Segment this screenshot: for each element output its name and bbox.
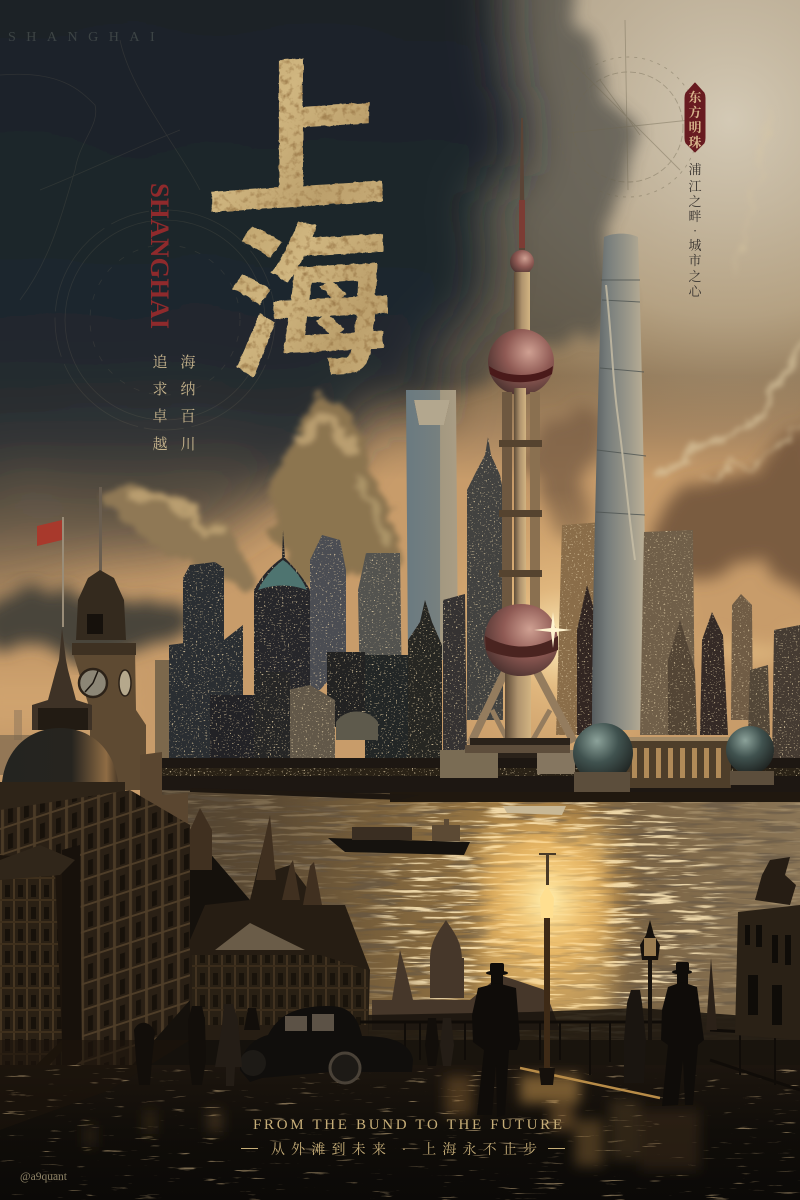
domed cupola building — [0, 628, 125, 812]
sun glow — [400, 480, 720, 780]
clock face right — [119, 670, 131, 696]
main title 上海 — [204, 0, 392, 414]
small figures by fence — [425, 1018, 439, 1066]
facade — [192, 955, 368, 1025]
background: sky — [0, 0, 800, 800]
tower behind — [183, 562, 243, 700]
map lines left — [0, 40, 275, 430]
man near buildings — [134, 1023, 155, 1085]
mid tower — [327, 652, 365, 727]
people left — [134, 1004, 454, 1086]
sphere band — [489, 366, 553, 382]
tower body — [72, 650, 146, 790]
Bund middle buildings — [190, 808, 370, 1040]
vintage car — [240, 1006, 413, 1085]
seal 东方明珠: 方 — [688, 105, 702, 120]
Shanghai Tower — [592, 234, 646, 730]
lower column — [505, 672, 531, 750]
decorative map text and compass — [0, 20, 698, 430]
man with hat — [472, 963, 520, 1117]
tagline 浦江之畔 城市之心: 之 — [688, 269, 702, 284]
skyscrapers group left — [169, 530, 408, 765]
tagline 浦江之畔 城市之心: · — [693, 223, 697, 238]
tagline 浦江之畔 城市之心: 城 — [688, 238, 702, 253]
tower head — [76, 570, 126, 640]
lower right tower block — [140, 752, 188, 830]
tagline 浦江之畔 城市之心: 之 — [688, 194, 702, 209]
lower sphere — [484, 604, 558, 676]
left Bund buildings — [0, 790, 190, 1130]
low dark — [210, 695, 288, 762]
poem column left: 追 — [152, 354, 168, 371]
ground promenade — [0, 1040, 800, 1200]
clock hands — [85, 671, 98, 692]
low lit block — [287, 685, 335, 762]
small white boat — [503, 806, 566, 815]
poem column left: 越 — [152, 436, 168, 453]
poem column right: 海 — [180, 354, 196, 371]
brown tower with dark inner — [556, 522, 606, 735]
small dome — [336, 712, 378, 740]
distant dome behind fence — [372, 920, 560, 1030]
glass domes and hall — [573, 723, 774, 792]
ferry boat — [328, 819, 470, 855]
light tower — [310, 535, 346, 690]
fence — [360, 1022, 800, 1098]
tagline 浦江之畔 城市之心 — [688, 162, 702, 299]
top sphere — [510, 250, 534, 274]
poem column right: 纳 — [180, 380, 196, 398]
river — [162, 790, 800, 1040]
Chinese slogan: 从外滩到未来 · 上海永不止步 — [271, 1141, 537, 1158]
clock face left — [79, 669, 107, 697]
far river bank — [190, 788, 800, 815]
Jin Mao Tower — [467, 437, 503, 720]
seal 东方明珠 — [685, 83, 705, 152]
dome — [2, 728, 118, 782]
lantern columns — [38, 708, 88, 730]
horizon glow left — [0, 680, 130, 725]
waterfront band — [150, 738, 800, 794]
pavilion roof — [215, 923, 305, 950]
right building — [706, 857, 800, 1040]
Oriental Pearl Tower — [470, 118, 574, 750]
golden cumulus centre — [105, 400, 399, 595]
low pavilions — [440, 750, 498, 778]
woman — [215, 1004, 242, 1086]
man — [188, 1006, 206, 1085]
tower spire and flagpole — [99, 487, 102, 577]
sun flare — [534, 612, 572, 648]
poem column left — [152, 354, 168, 453]
tagline 浦江之畔 城市之心: 江 — [688, 179, 702, 194]
dome teal cap — [258, 560, 307, 590]
poem column left: 卓 — [152, 407, 168, 425]
blue dome tower — [254, 530, 310, 690]
seal 东方明珠: 珠 — [688, 135, 702, 150]
vertical red SHANGHAI: SHANGHAI — [145, 183, 174, 329]
poem column right: 川 — [180, 436, 196, 453]
street lamp right — [640, 920, 660, 1040]
poem column right: 百 — [180, 408, 196, 425]
tagline 浦江之畔 城市之心: 浦 — [688, 162, 702, 177]
tagline 浦江之畔 城市之心: 畔 — [688, 209, 702, 224]
street lamp main — [480, 830, 614, 1085]
third man — [624, 990, 646, 1083]
seal 东方明珠: 东 — [688, 90, 702, 105]
mid-ground dark towers — [408, 594, 467, 760]
dark low clouds left — [0, 586, 178, 660]
right dome — [726, 726, 774, 774]
tagline 浦江之畔 城市之心: 心 — [688, 284, 702, 299]
Shanghai World Financial Center — [406, 390, 458, 660]
low right — [254, 672, 290, 762]
upper sphere — [488, 329, 554, 395]
right skyscrapers — [640, 530, 800, 760]
left dome — [573, 723, 633, 783]
man by car — [244, 1008, 260, 1030]
bright cloud streaks right — [660, 110, 800, 480]
faint top-left wordmark: SHANGHAI — [8, 30, 165, 45]
English slogan: FROM THE BUND TO THE FUTURE — [253, 1117, 562, 1133]
flag — [37, 517, 64, 627]
front block — [169, 641, 210, 765]
poem column right — [180, 354, 196, 453]
hall — [625, 738, 731, 788]
warm brown clouds right — [540, 404, 800, 657]
upper shaft — [514, 272, 530, 334]
cupola spire — [32, 628, 92, 730]
seal 东方明珠: 明 — [688, 120, 702, 135]
compass right — [558, 20, 698, 197]
clock tower — [72, 487, 188, 830]
man with hat right — [661, 962, 704, 1106]
spires — [190, 808, 322, 905]
tagline 浦江之畔 城市之心: 市 — [688, 253, 702, 268]
spire — [519, 118, 525, 250]
far skyline left — [0, 660, 171, 775]
puddle reflections — [85, 1075, 700, 1170]
main title 上海: 海 — [226, 165, 392, 414]
promenade railing shadow — [368, 1008, 800, 1070]
twin tower — [358, 553, 402, 700]
tower legs — [470, 672, 574, 745]
main title 上海: 上 — [204, 0, 390, 255]
watermark: @a9quant — [20, 1171, 68, 1183]
columns — [499, 388, 542, 614]
lower sphere band — [485, 636, 558, 658]
mid grey storm edge — [400, 0, 640, 400]
poem column left: 求 — [152, 381, 168, 398]
dark storm sky with old map — [0, 0, 510, 620]
